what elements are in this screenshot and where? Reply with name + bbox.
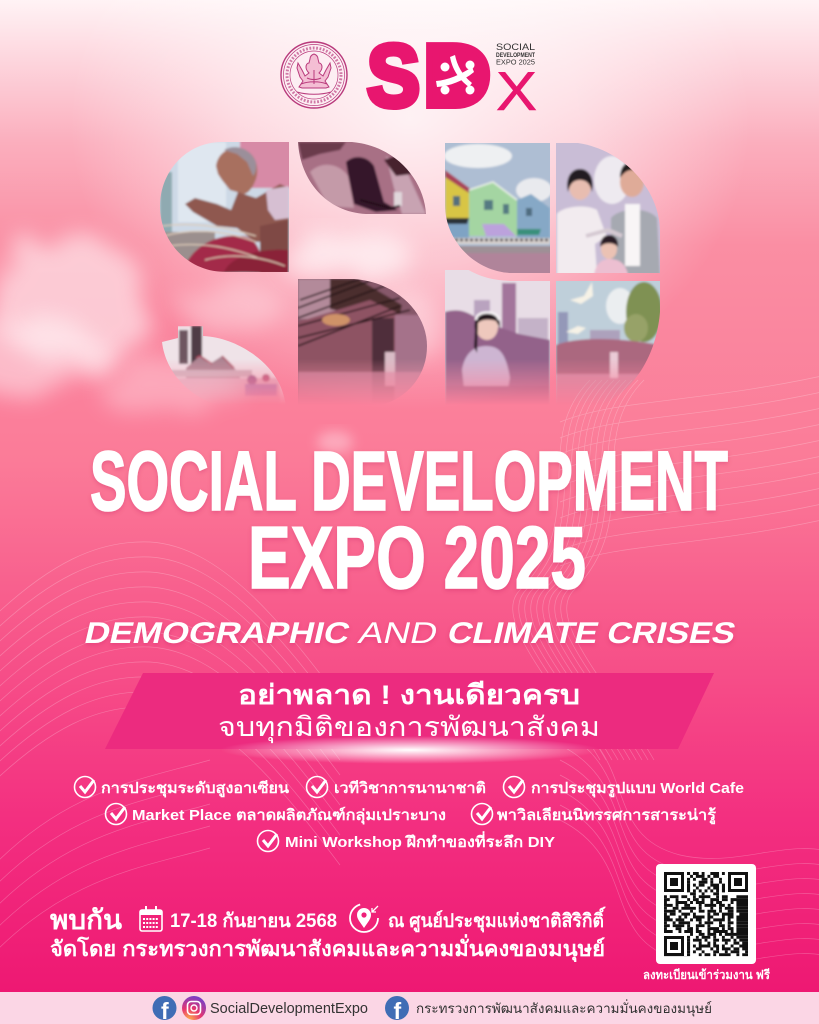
- banner: [105, 673, 714, 764]
- icon: facebook: f: [161, 998, 169, 1024]
- QR finder top-right: [725, 872, 748, 895]
- item: Mini Workshop: [258, 830, 555, 852]
- banner glow: [220, 736, 600, 764]
- meet label: พบกัน: [50, 905, 123, 935]
- item: international forum: เวทีวิชาการนานาชาติ: [334, 779, 486, 797]
- logo: SDX: [367, 26, 537, 125]
- photo: colourful houses by canal: [445, 143, 550, 273]
- logo letter X: X: [496, 60, 537, 122]
- facebook page name: SocialDevelopmentExpo: [210, 1001, 368, 1017]
- item: Market Place: [106, 804, 446, 825]
- organiser: จัดโดย กระทรวงการพัฒนาสังคมและความมั่นคงของมนุษย์: [50, 933, 605, 963]
- top white glow: [70, 0, 750, 410]
- activities checklist: [74, 776, 744, 852]
- logo: government seal: [281, 42, 347, 108]
- QR finder top-left: [664, 872, 687, 895]
- QR modules: [664, 874, 748, 955]
- photo: woman with headphones in wheelchair: [445, 270, 550, 402]
- subtitle: DEMOGRAPHIC: [81, 616, 353, 650]
- item: ASEAN high-level meeting: การประชุมระดับสูงอาเซียน: [101, 780, 290, 798]
- photo: person in wheelchair: [298, 142, 426, 214]
- item: Mini Workshop: Mini Workshop ฝึกทำของที่ระลึก DIY: [285, 831, 555, 851]
- item: international forum: [306, 776, 486, 798]
- subtitle: AND: [355, 616, 441, 650]
- icon: location pin: [350, 904, 378, 932]
- photo: city and houses: [162, 326, 284, 401]
- title line 2: EXPO 2025: [248, 508, 586, 607]
- logo small wording: SOCIAL: [496, 42, 535, 52]
- photo: park with tree and doves: [556, 281, 660, 398]
- icon: facebook: [152, 996, 176, 1024]
- event details: [50, 904, 606, 963]
- photo: smiling family: [556, 143, 660, 273]
- icon: calendar: [140, 906, 162, 931]
- banner subline: จบทุกมิติของการพัฒนาสังคม: [218, 712, 600, 744]
- photo: elderly man weaving: [160, 142, 289, 272]
- logo mark: linked people: [436, 55, 474, 94]
- item: pavilion: พาวิลเลียนนิทรรศการสาระน่ารู้: [497, 806, 717, 825]
- logo letter D: D: [423, 26, 491, 125]
- banner headline: อย่าพลาด ! งานเดียวครบ: [238, 680, 580, 710]
- icon: facebook: [385, 996, 409, 1024]
- clouds: [0, 234, 438, 453]
- item: ASEAN high-level meeting: [74, 776, 290, 798]
- item: World Cafe: [504, 776, 744, 798]
- item: World Cafe: การประชุมรูปแบบ World Cafe: [531, 780, 744, 798]
- QR finder bottom-left: [664, 933, 687, 956]
- item: Market Place: Market Place ตลาดผลิตภัณฑ์กลุ่มเปราะบาง: [132, 806, 446, 825]
- date: 17-18 กันยายน 2568: [170, 911, 337, 932]
- QR code card: [643, 864, 770, 982]
- icon: facebook: f: [394, 998, 402, 1024]
- ministry page name: กระทรวงการพัฒนาสังคมและความมั่นคงของมนุษย์: [416, 999, 712, 1017]
- venue: ณ ศูนย์ประชุมแห่งชาติสิริกิติ์: [388, 906, 606, 933]
- logo small wording: EXPO 2025: [496, 58, 535, 66]
- subtitle: [81, 616, 739, 650]
- item: pavilion: [472, 804, 717, 825]
- subtitle: CLIMATE CRISES: [444, 616, 739, 650]
- title: [90, 434, 728, 607]
- photo collage forming SD: [155, 138, 664, 416]
- logo small wording: [496, 42, 535, 66]
- footer bar: [0, 992, 819, 1024]
- photo: overhead cables and old building: [298, 279, 427, 400]
- logo letter S: S: [367, 26, 420, 125]
- icon: instagram: [182, 996, 206, 1020]
- wave line pattern: [0, 372, 819, 968]
- logo small wording: DEVELOPMENT: [496, 52, 535, 59]
- QR caption: ลงทะเบียนเข้าร่วมงาน ฟรี: [643, 968, 770, 982]
